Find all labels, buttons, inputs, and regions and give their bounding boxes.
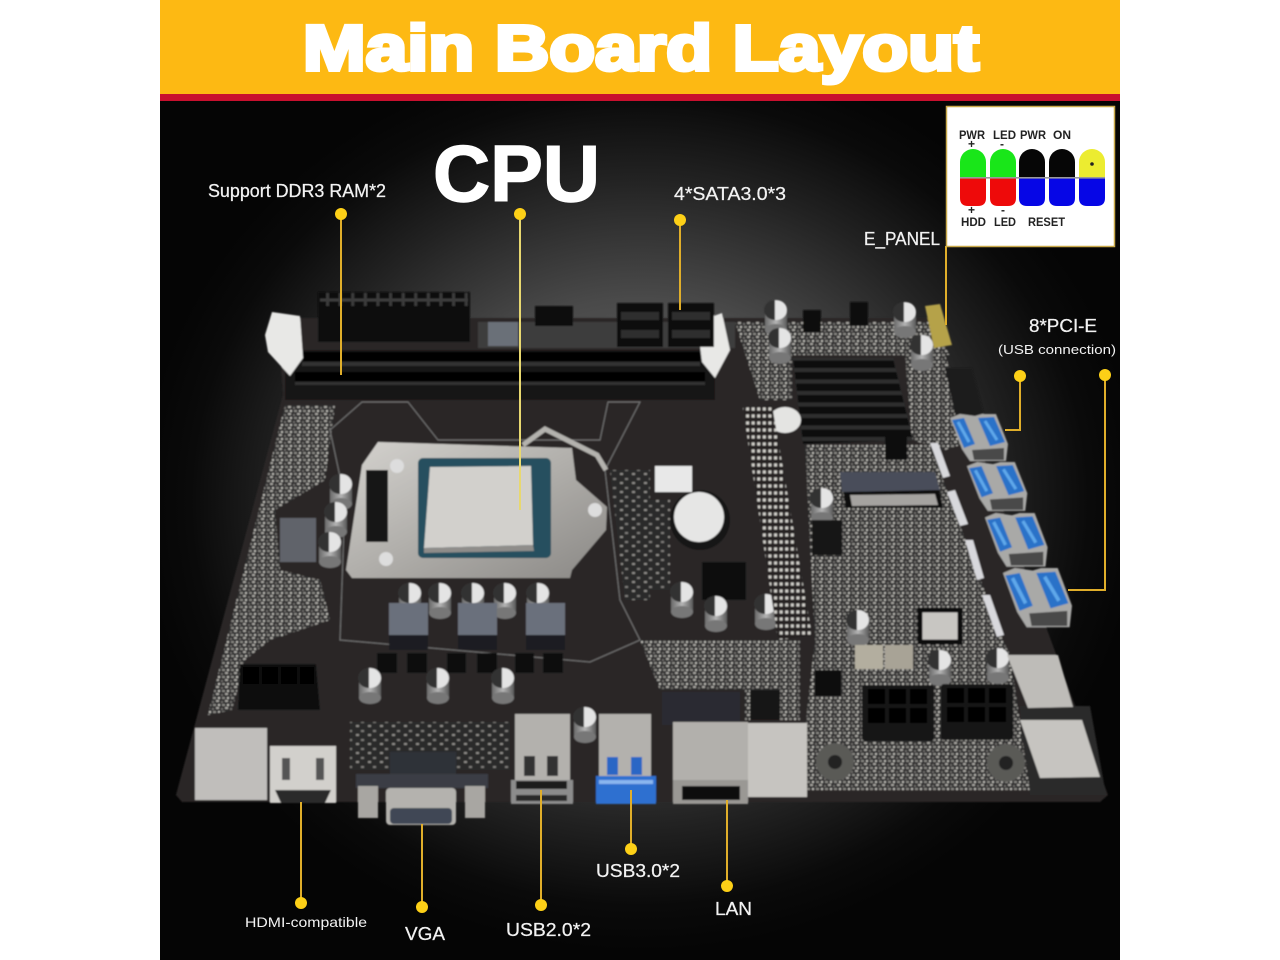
- pin pills: [960, 149, 1105, 206]
- VRM capacitors and inductors: [280, 474, 565, 704]
- callout: LAN: [715, 800, 752, 919]
- retention lever: [523, 429, 606, 470]
- diagonal PCIe pad strip: [743, 405, 812, 640]
- callout: USB2.0: [506, 790, 591, 940]
- legend: E_PANEL pinout: -: [1001, 203, 1005, 217]
- processor: [424, 466, 533, 548]
- motherboard: [176, 292, 1108, 825]
- callout: USB3.0: USB3.0*2: [596, 861, 680, 881]
- callout: VGA: [405, 824, 445, 944]
- legend: E_PANEL pinout: PWR: [1020, 128, 1046, 142]
- USB 3.0 port stack: [596, 714, 656, 804]
- callout: HDMI: HDMI-compatible: [245, 914, 367, 930]
- callout: E_PANEL: E_PANEL: [864, 229, 940, 250]
- label: CPU heading: CPU: [433, 129, 600, 218]
- callout: RAM: Support DDR3 RAM*2: [208, 181, 386, 201]
- VGA port: [356, 752, 488, 825]
- callout: PCI-E: [998, 316, 1116, 590]
- legend: E_PANEL pinout: +: [968, 203, 975, 217]
- capacitors top right: [764, 300, 933, 371]
- 24-pin ATX connector: [318, 292, 470, 342]
- legend: E_PANEL pinout: LED: [994, 215, 1016, 229]
- callout: VGA: VGA: [405, 924, 445, 944]
- callout: RAM: [208, 181, 386, 375]
- callout: SATA: [674, 184, 786, 310]
- legend: E_PANEL pinout: ON: [1053, 128, 1071, 142]
- metal frame: [346, 442, 607, 578]
- board PCB: [176, 318, 1108, 802]
- USB PCI-E ports: [930, 414, 1072, 637]
- legend: E_PANEL pinout: +: [968, 137, 975, 151]
- callout: SATA: 4*SATA3.0*3: [674, 184, 786, 204]
- legend: E_PANEL pinout: HDD: [961, 215, 986, 229]
- SATA connectors: [617, 303, 714, 347]
- header cluster and capacitors mid: [670, 407, 1009, 720]
- silkscreen component areas: [208, 322, 1106, 795]
- callout: PCI-E: (USB connection): [998, 342, 1116, 357]
- socket keepout outline: [330, 402, 640, 662]
- DDR3 RAM slots: [265, 312, 730, 400]
- callout: USB2.0: USB2.0*2: [506, 920, 591, 940]
- heatsink: [793, 358, 913, 444]
- 8-pin CPU power connector: [238, 664, 320, 710]
- M.2 slot: [840, 472, 943, 508]
- callout: USB3.0: [596, 790, 680, 881]
- callout: E_PANEL: [864, 229, 946, 325]
- callout: PCI-E: 8*PCI-E: [1029, 316, 1097, 336]
- callout: CPU: [514, 208, 526, 510]
- silver pads: [195, 655, 1100, 800]
- CPU socket and processor: [346, 429, 607, 578]
- PCIe power connectors: [862, 684, 1013, 741]
- legend: E_PANEL pinout: RESET: [1028, 215, 1066, 229]
- USB 2.0 port stack: [511, 714, 573, 804]
- LAN port: [673, 722, 748, 804]
- header banner: [160, 0, 1120, 101]
- socket opening: [418, 458, 551, 558]
- legend: E_PANEL pinout: [946, 106, 1114, 246]
- legend: E_PANEL pinout: PWR: [959, 128, 985, 142]
- HDMI port: [270, 746, 336, 803]
- CMOS battery: [655, 466, 730, 550]
- dark panel background: [160, 95, 1120, 960]
- small headers: [488, 302, 985, 418]
- legend: E_PANEL pinout: LED: [993, 128, 1016, 142]
- callout: LAN: LAN: [715, 899, 752, 919]
- legend: E_PANEL pinout: -: [1000, 137, 1004, 151]
- title: Main Board Layout: [303, 12, 979, 84]
- callout: HDMI: [245, 802, 367, 930]
